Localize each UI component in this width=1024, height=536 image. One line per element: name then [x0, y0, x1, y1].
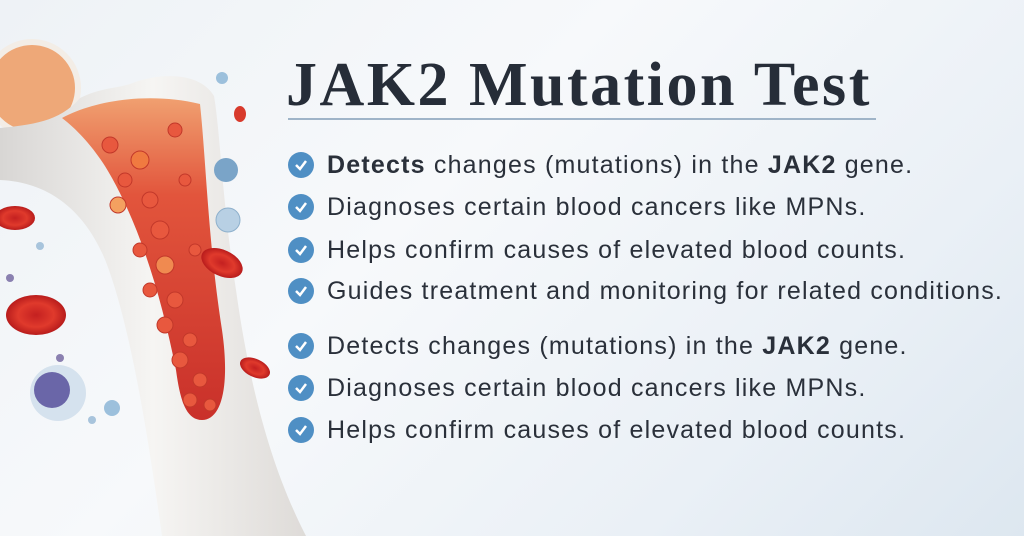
illustration: bone with marrow and blood cells — [0, 39, 306, 536]
item 1: Detects changes (mutations) in the JAK2 gene. — [327, 150, 913, 178]
item 7: Helps confirm causes of elevated blood counts. — [327, 416, 906, 444]
item 2: Diagnoses certain blood cancers like MPNs. — [327, 192, 867, 220]
item 5: Detects changes (mutations) in the JAK2 gene. — [327, 332, 908, 360]
item 4: Guides treatment and monitoring for related conditions. — [327, 276, 1003, 304]
title: JAK2 Mutation Test — [286, 51, 872, 119]
checklist — [288, 150, 1003, 444]
item 3: Helps confirm causes of elevated blood counts. — [327, 236, 906, 264]
item 6: Diagnoses certain blood cancers like MPNs. — [327, 374, 867, 402]
